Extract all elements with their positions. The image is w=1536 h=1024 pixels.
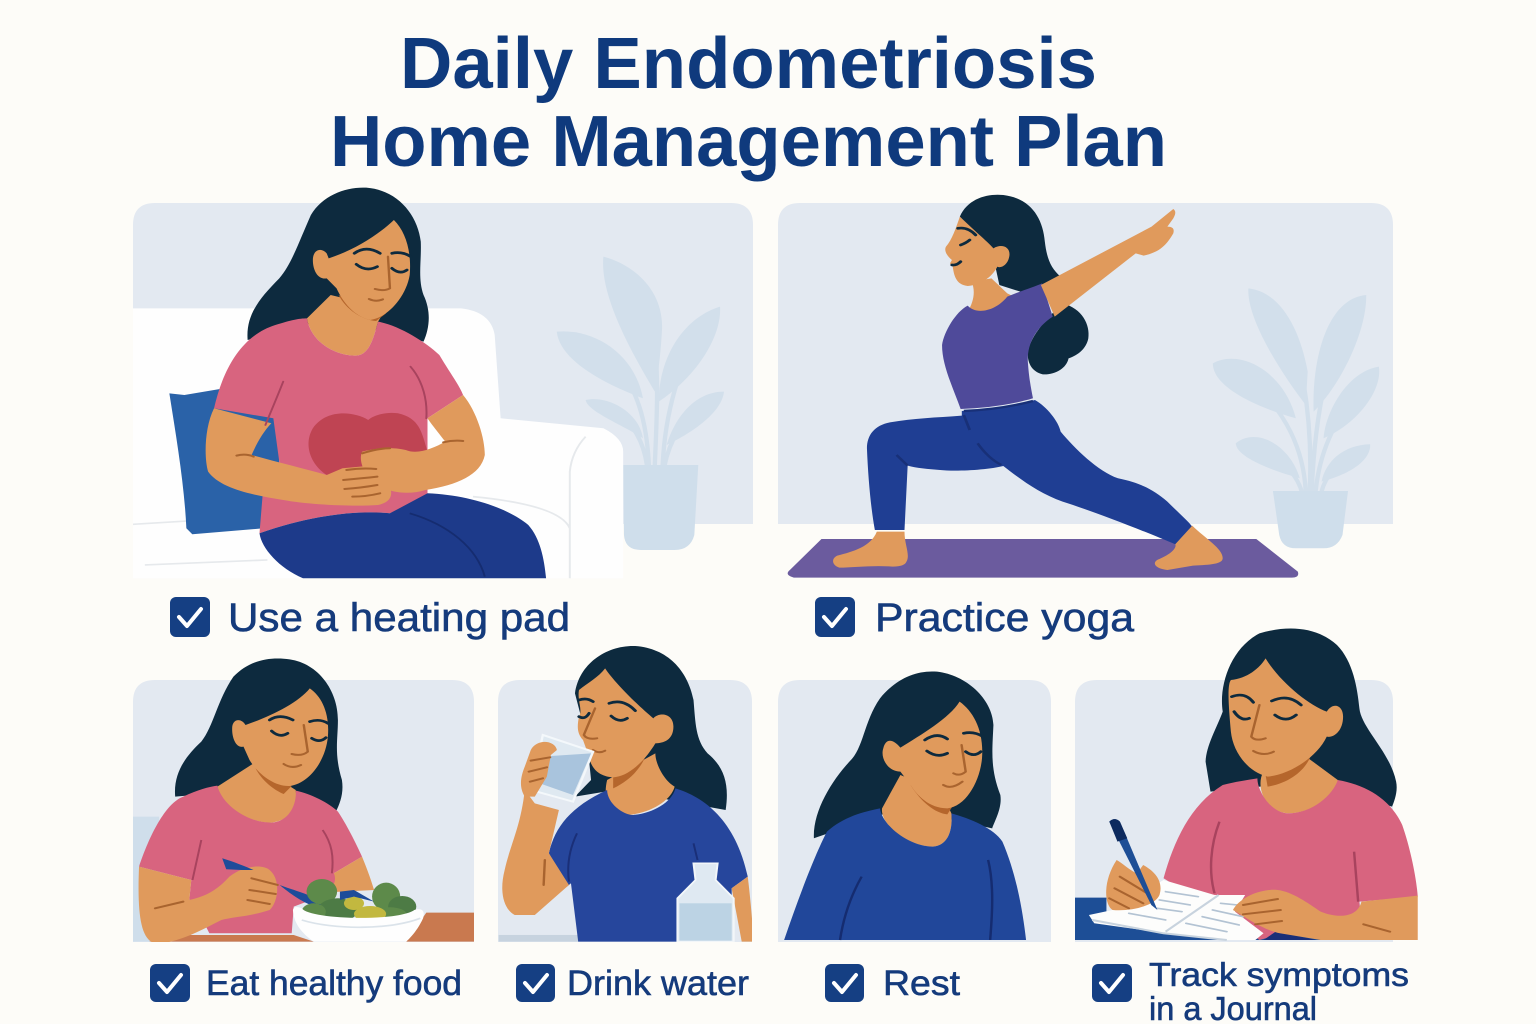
label: rest: Rest bbox=[883, 964, 960, 1003]
panel: use a heating pad bbox=[133, 188, 753, 578]
right hand bbox=[1233, 890, 1418, 940]
icon: glass of water bbox=[521, 735, 593, 802]
title: Daily Endometriosis bbox=[400, 24, 1097, 104]
woman writing bbox=[1164, 629, 1418, 940]
woman in warrior pose bbox=[833, 195, 1223, 570]
panel: eat healthy food bbox=[133, 659, 475, 944]
icon: checkbox bbox=[516, 964, 555, 1002]
icon: yoga mat bbox=[788, 539, 1298, 578]
icon: checkbox bbox=[150, 964, 190, 1002]
label: use a heating pad: Use a heating pad bbox=[228, 596, 570, 640]
icon: journal bbox=[1089, 880, 1264, 940]
woman drinking bbox=[502, 646, 754, 942]
icon: water bottle bbox=[677, 863, 734, 942]
panel: track symptoms bbox=[1074, 629, 1418, 942]
title: Home Management Plan bbox=[330, 102, 1167, 182]
icon: pillow bbox=[169, 389, 279, 534]
icon: plant bbox=[557, 257, 724, 550]
icon: checkbox bbox=[1092, 964, 1132, 1002]
panel: drink water bbox=[498, 646, 754, 942]
table bbox=[1074, 898, 1321, 940]
table bbox=[149, 913, 475, 942]
side block bbox=[133, 817, 159, 942]
icon: checkbox bbox=[825, 964, 864, 1002]
title bbox=[330, 24, 1167, 182]
woman resting bbox=[784, 671, 1026, 940]
panel: practice yoga bbox=[778, 195, 1393, 578]
icon: checkbox bbox=[815, 597, 855, 637]
label: track symptoms in a journal: Track symptoms bbox=[1149, 956, 1409, 993]
woman with heating pad bbox=[206, 188, 546, 578]
woman eating bbox=[139, 659, 374, 944]
icon: checkbox bbox=[170, 597, 210, 637]
label: rest bbox=[825, 964, 960, 1003]
sofa bbox=[133, 308, 623, 578]
icon: plant bbox=[1213, 288, 1379, 548]
label: eat healthy food: Eat healthy food bbox=[206, 964, 462, 1003]
label: drink water: Drink water bbox=[567, 964, 749, 1003]
label: track symptoms in a journal bbox=[1092, 956, 1409, 1024]
panel: rest bbox=[778, 671, 1051, 942]
label: practice yoga: Practice yoga bbox=[875, 596, 1135, 640]
left hand and pen bbox=[1106, 819, 1161, 910]
icon: salad bowl bbox=[293, 879, 424, 942]
